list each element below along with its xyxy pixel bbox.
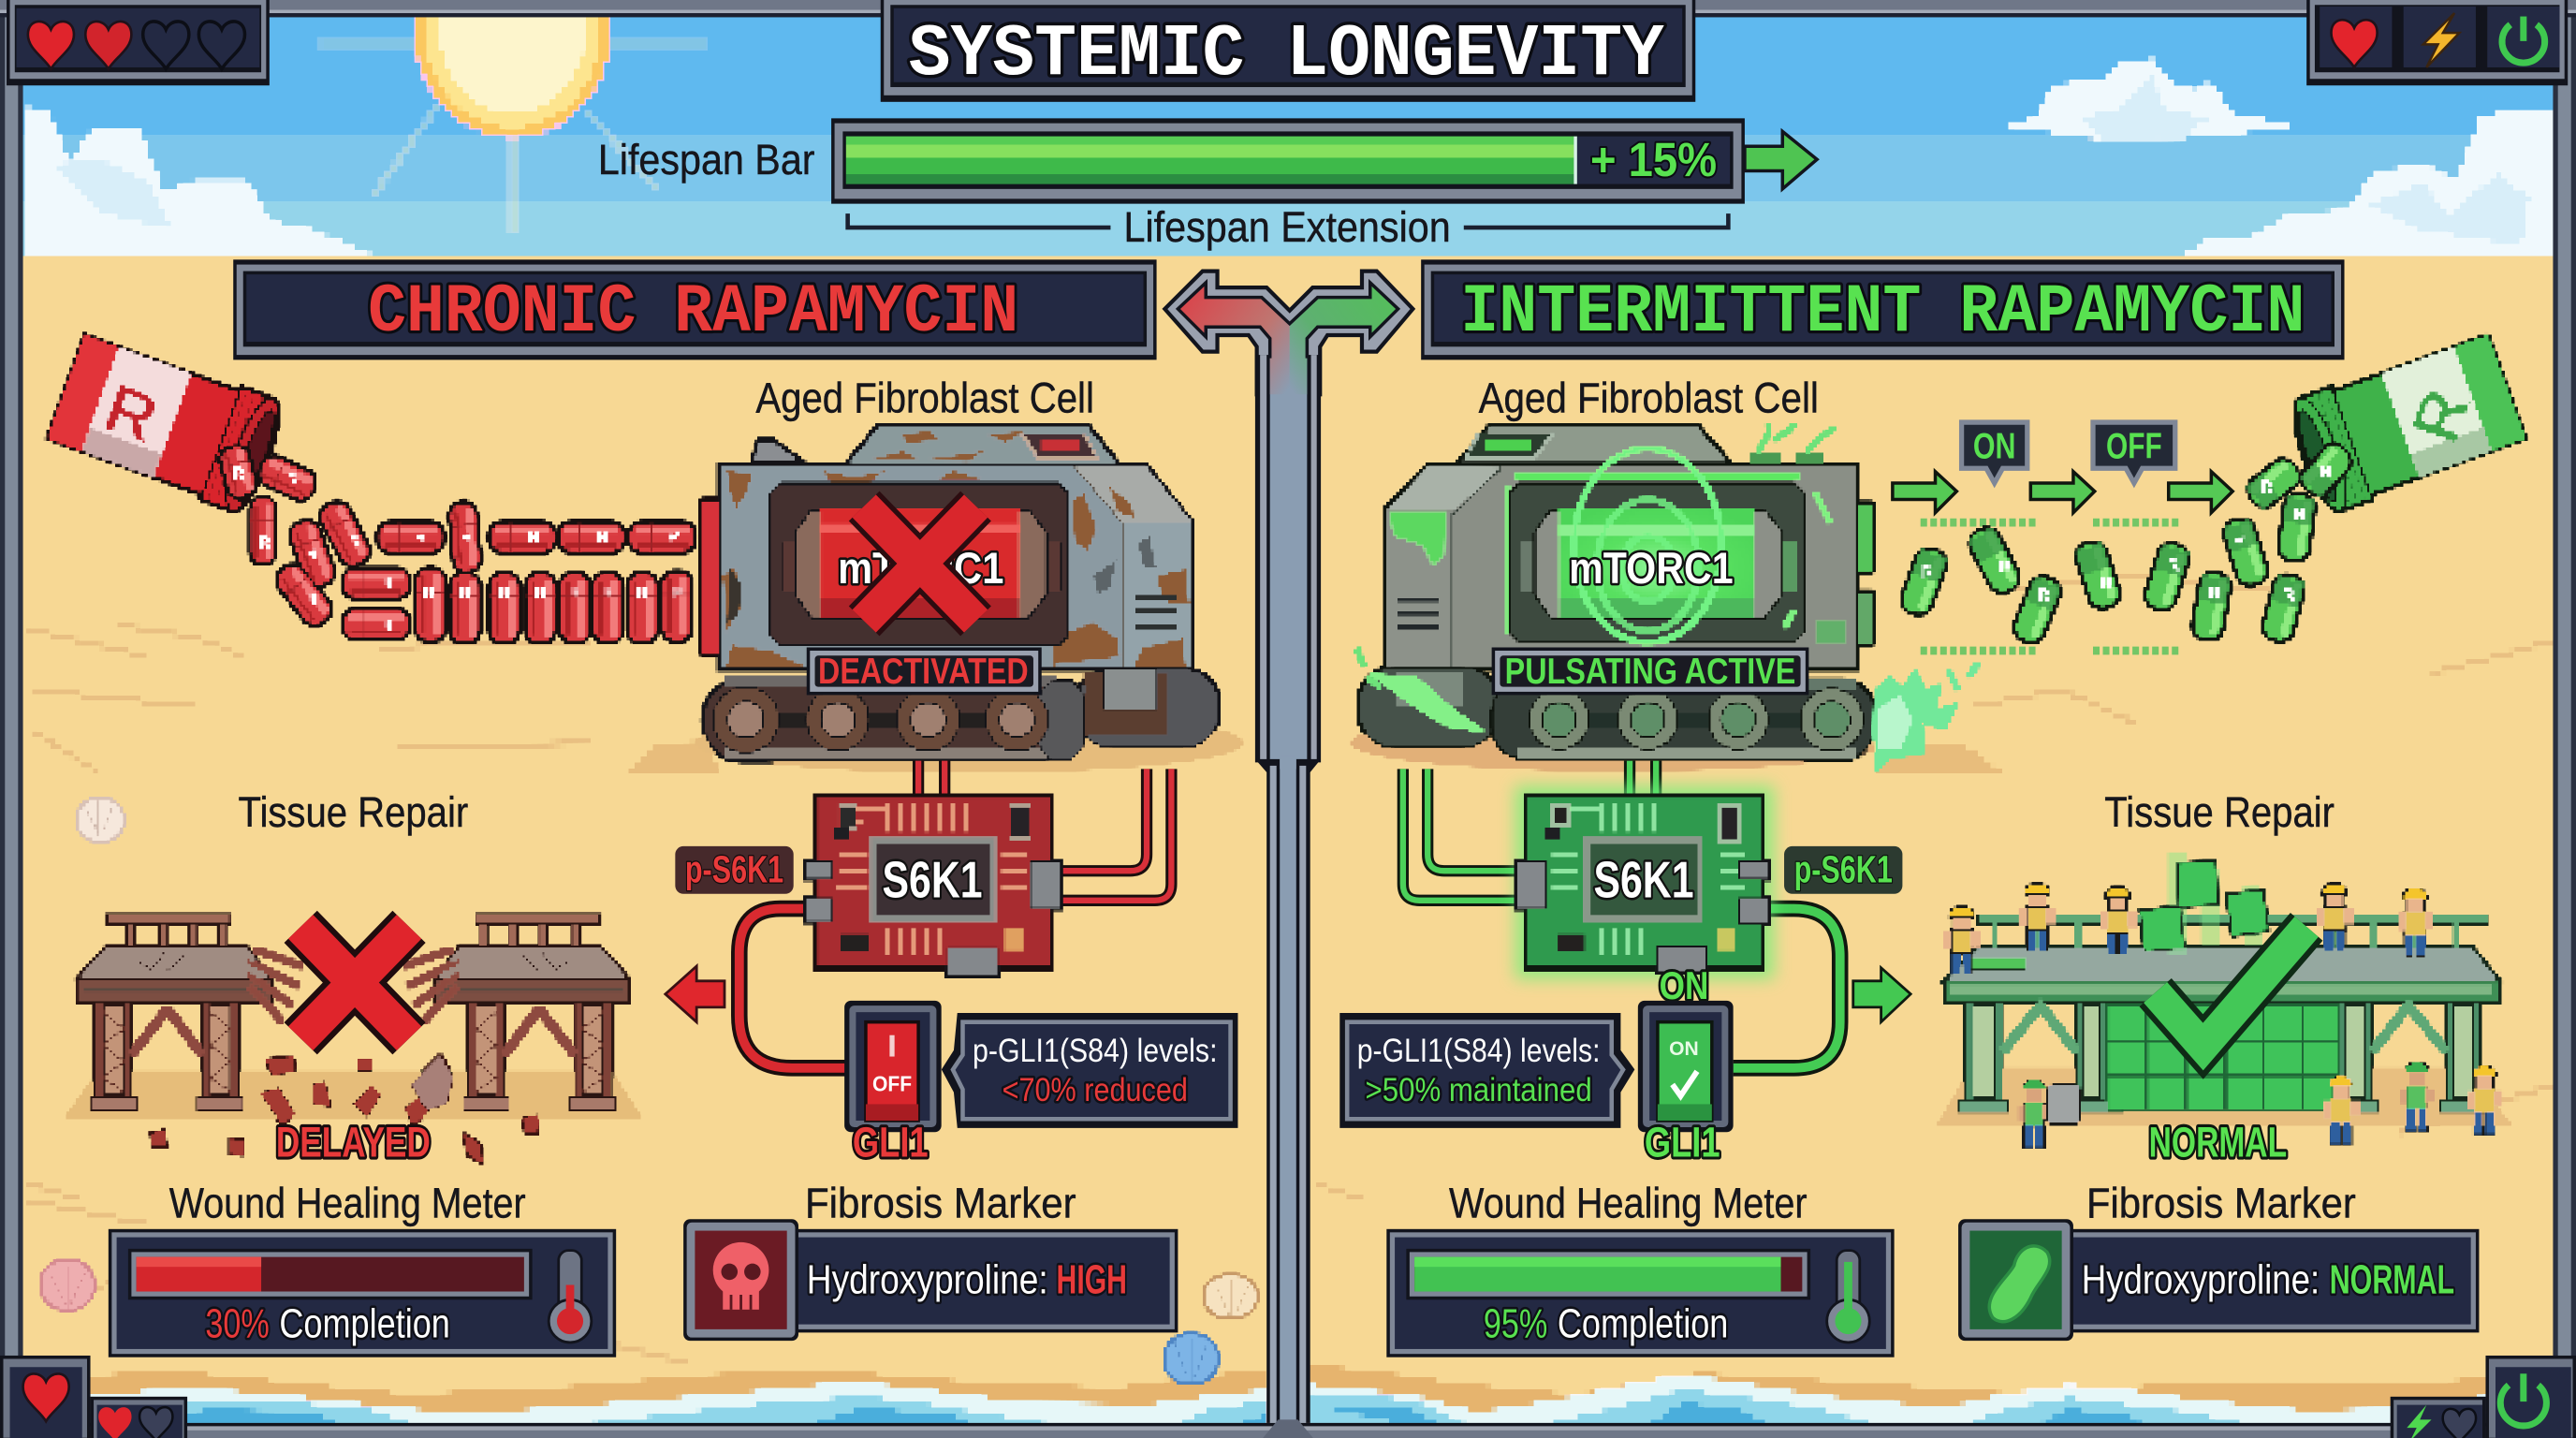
fibrosis marker: normal hydroxyproline: NORMAL	[2330, 1256, 2454, 1302]
red pill stream: R	[383, 619, 393, 635]
chronic header: CHRONIC RAPAMYCIN	[368, 274, 1018, 352]
HUD: hearts top left	[7, 0, 270, 85]
red pill stream: R	[671, 586, 682, 602]
green pill stream: R	[2100, 576, 2112, 592]
label: wound healing meter right: Wound Healing Meter	[1449, 1180, 1808, 1227]
GLI1 green label: GLI1	[1645, 1119, 1720, 1167]
red pill stream: R	[423, 586, 434, 602]
wound healing meter: 95%: Completion	[1558, 1301, 1728, 1347]
p-S6K1 green badge: p-S6K1	[1794, 847, 1893, 890]
green S6K1 circuit chip	[1515, 785, 1775, 979]
red pill stream: R	[603, 586, 613, 602]
lifespan bar	[831, 118, 1745, 204]
on bubble	[1962, 422, 2027, 483]
label: aged fibroblast cell right: Aged Fibroblast Cell	[1479, 374, 1819, 422]
big red cross on mTORC1	[864, 506, 976, 621]
HUD: small icons bottom right	[2391, 1397, 2485, 1438]
off bubble: OFF	[2106, 427, 2162, 467]
red pill stream: R	[349, 535, 360, 550]
off bubble	[2093, 422, 2175, 483]
red pill bottle: R	[95, 368, 168, 458]
HUD: heart bottom left	[0, 1356, 91, 1438]
tooltip: reduced levels: <70% reduced	[1003, 1072, 1188, 1108]
lifespan bar label: Lifespan Bar	[598, 136, 815, 183]
pulse dotted lines	[1921, 522, 2182, 651]
normal status: NORMAL	[2149, 1119, 2287, 1167]
GLI1 off switch	[844, 1001, 942, 1132]
fibrosis marker: normal hydroxyproline	[1958, 1219, 2479, 1341]
GLI1 red label: GLI1	[853, 1119, 929, 1167]
red cross over gap	[300, 927, 409, 1038]
bracket label: Lifespan Extension	[1123, 203, 1451, 251]
red pill stream: R	[461, 530, 472, 546]
green check mark	[2156, 927, 2306, 1047]
wound healing meter: 30%	[109, 1229, 616, 1357]
lifespan value: + 15%	[1590, 133, 1717, 186]
fibrosis marker: high hydroxyproline: Hydroxyproline:	[807, 1256, 1048, 1302]
tooltip: reduced levels: p-GLI1(S84) levels:	[973, 1033, 1218, 1069]
green pill stream: R	[2294, 507, 2305, 523]
red pill stream: R	[233, 466, 243, 482]
green pill stream: R	[1922, 565, 1932, 580]
shell: white	[77, 799, 124, 842]
red pill stream: R	[570, 586, 580, 602]
green pill stream: R	[2261, 479, 2273, 495]
mTORC1 active label: mTORC1	[1569, 544, 1734, 594]
title panel	[881, 0, 1695, 102]
shell: pink	[41, 1260, 94, 1310]
GLI1 on switch	[1638, 1001, 1734, 1132]
on bubble: ON	[1973, 427, 2016, 467]
shell: cream	[1204, 1275, 1257, 1318]
p-S6K1 red badge: p-S6K1	[685, 847, 783, 890]
green pill stream: R	[2209, 586, 2220, 602]
fibrosis marker: normal hydroxyproline: Hydroxyproline:	[2082, 1256, 2320, 1302]
wound healing meter: 95%: 95%	[1484, 1301, 1547, 1347]
red pill bottle	[47, 331, 287, 516]
red pill stream: R	[460, 586, 470, 602]
red wires from tank to chip	[739, 761, 1171, 1068]
red S6K1 circuit chip	[807, 797, 1060, 976]
label: tissue repair left: Tissue Repair	[238, 788, 468, 836]
wound healing meter: 30%: Completion	[279, 1301, 450, 1347]
red pill stream: R	[259, 535, 270, 550]
tooltip: maintained levels: >50% maintained	[1365, 1072, 1592, 1108]
red pill stream: R	[287, 473, 298, 489]
label: fibrosis marker left: Fibrosis Marker	[805, 1180, 1076, 1227]
fibrosis marker: high hydroxyproline	[683, 1219, 1178, 1341]
lifespan extension bracket	[848, 203, 1728, 251]
red pill stream	[218, 444, 695, 642]
green direction arrow	[1853, 968, 1910, 1022]
label: aged fibroblast cell left: Aged Fibroblast Cell	[755, 374, 1094, 422]
mTORC1 label under the cross: mTORC1	[838, 544, 1003, 594]
wound healing meter: 95%	[1386, 1229, 1895, 1357]
green pill stream	[1898, 441, 2355, 646]
delayed status: DELAYED	[276, 1119, 431, 1167]
red pill stream: R	[307, 547, 317, 563]
red pill stream: R	[383, 576, 393, 592]
tooltip: maintained levels: p-GLI1(S84) levels:	[1357, 1033, 1600, 1069]
fibrosis marker: high hydroxyproline: HIGH	[1057, 1256, 1127, 1302]
repaired bridge with construction crew	[1939, 855, 2510, 1147]
broken bridge	[66, 916, 640, 1164]
green pill stream: R	[2234, 534, 2245, 550]
GLI1 off switch: OFF	[872, 1071, 912, 1095]
HUD: status icons top right	[2306, 0, 2568, 85]
red pill stream: R	[529, 530, 539, 546]
label: wound healing meter left: Wound Healing Meter	[169, 1180, 526, 1227]
green S6K1 circuit chip: S6K1	[1593, 851, 1694, 908]
wound healing meter: 30%: 30%	[205, 1301, 270, 1347]
green pill stream: R	[2039, 588, 2049, 604]
green pill stream: R	[2321, 464, 2332, 480]
GLI1 on label above switch: ON	[1660, 963, 1708, 1007]
chronic header	[233, 259, 1157, 360]
shell: blue	[1164, 1334, 1218, 1384]
tooltip: reduced levels	[946, 1017, 1234, 1123]
label: fibrosis marker right: Fibrosis Marker	[2086, 1180, 2356, 1227]
green wires from tank to chip	[1403, 761, 1840, 1068]
green pill bottle	[2285, 331, 2526, 516]
red pill stream: R	[535, 586, 546, 602]
pulse arrows	[1893, 472, 2232, 513]
HUD: small hearts bottom left	[91, 1397, 187, 1438]
red pill stream: R	[637, 586, 648, 602]
green pill stream: R	[1999, 560, 2010, 576]
deactivated tag: DEACTIVATED	[818, 652, 1029, 692]
tooltip: maintained levels	[1344, 1017, 1630, 1123]
pulsating green tank: intermittent mTORC1 cell	[1352, 424, 1978, 772]
red pill stream: R	[668, 530, 679, 546]
red pill stream: R	[307, 593, 317, 609]
pulsating active tag: PULSATING ACTIVE	[1505, 652, 1795, 692]
green pill stream: R	[2168, 558, 2179, 574]
label: tissue repair right: Tissue Repair	[2104, 788, 2334, 836]
sky background with sun and clouds	[0, 0, 2576, 259]
lifespan arrow	[1745, 131, 1817, 189]
green pill bottle: R	[2395, 379, 2485, 453]
intermittent header: INTERMITTENT RAPAMYCIN	[1460, 274, 2305, 352]
central divider with branching arrows	[1164, 271, 1412, 1438]
red S6K1 circuit chip: S6K1	[882, 851, 983, 908]
red pill stream: R	[499, 586, 510, 602]
green pill stream: R	[2283, 588, 2294, 604]
red pill stream: R	[416, 530, 426, 546]
HUD: power button bottom right	[2485, 1356, 2576, 1438]
red direction arrow	[666, 966, 724, 1022]
GLI1 on switch: ON	[1669, 1038, 1699, 1060]
rusty tank: chronic mTORC1 cell	[696, 426, 1242, 772]
red pill stream: R	[597, 530, 608, 546]
title text: SYSTEMIC LONGEVITY	[909, 12, 1664, 96]
